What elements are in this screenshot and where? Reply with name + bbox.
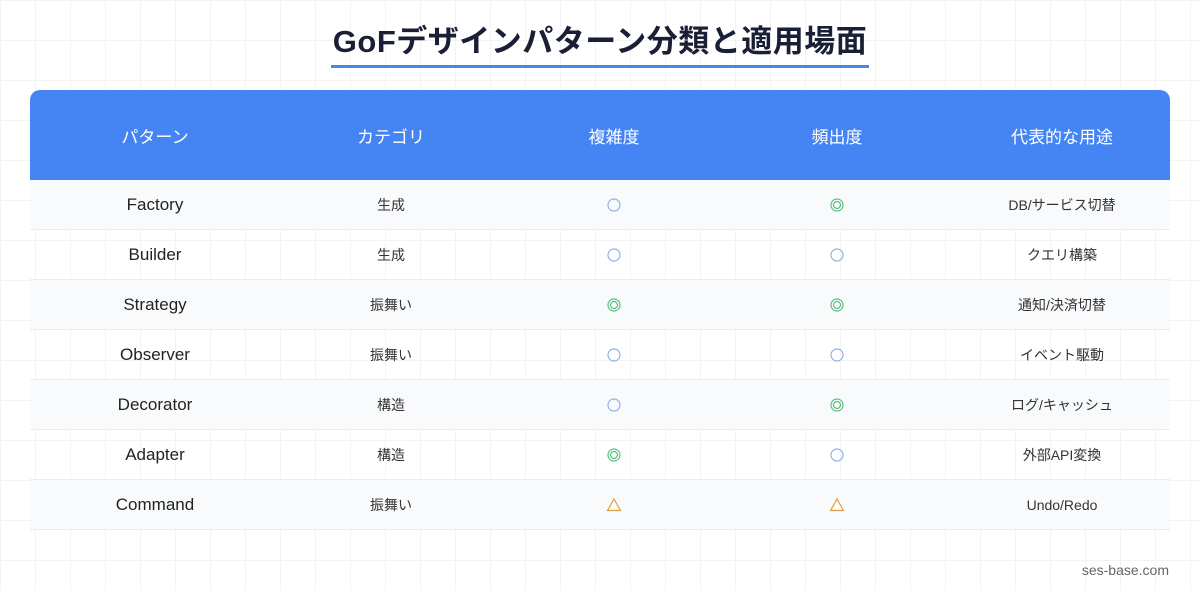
row: Strategy [30, 280, 1170, 330]
table header: 複雑度 [588, 128, 640, 146]
row: Builder [30, 230, 1170, 280]
title: GoFデザインパターン分類と適用場面 [333, 24, 867, 59]
row: Command [30, 480, 1170, 530]
row: Decorator: ログ/キャッシュ [1011, 396, 1113, 412]
row: Factory: Factory [127, 194, 183, 214]
row: Strategy: 振舞い [370, 296, 412, 312]
row: Factory: 生成 [377, 196, 405, 212]
table header: パターン [121, 128, 189, 146]
row: Command: Command [116, 494, 194, 514]
row: Adapter [30, 430, 1170, 480]
table header: 代表的な用途 [1011, 128, 1113, 146]
row: Adapter: 構造 [377, 446, 405, 462]
row: Observer [30, 330, 1170, 380]
table header [30, 90, 1170, 180]
row: Strategy: 通知/決済切替 [1018, 296, 1106, 312]
table header: カテゴリ [357, 128, 425, 146]
footer: source: ses-base.com [1082, 562, 1169, 578]
row: Factory: DB/サービス切替 [1008, 196, 1116, 212]
row: Observer: Observer [120, 344, 190, 364]
row: Observer: イベント駆動 [1020, 346, 1104, 362]
table header: 頻出度 [812, 128, 862, 146]
row: Command: Undo/Redo [1027, 496, 1097, 512]
row: Decorator: 構造 [377, 396, 405, 412]
row: Decorator: Decorator [118, 394, 192, 414]
row: Builder: クエリ構築 [1027, 246, 1097, 262]
row: Adapter: 外部API変換 [1023, 446, 1101, 462]
row: Observer: 振舞い [370, 346, 412, 362]
row: Strategy: Strategy [123, 294, 187, 314]
row: Factory [30, 180, 1170, 230]
row: Decorator [30, 380, 1170, 430]
table [30, 90, 1170, 530]
row: Builder: Builder [129, 244, 181, 264]
row: Command: 振舞い [370, 496, 412, 512]
row: Adapter: Adapter [125, 444, 185, 464]
row: Builder: 生成 [377, 246, 405, 262]
